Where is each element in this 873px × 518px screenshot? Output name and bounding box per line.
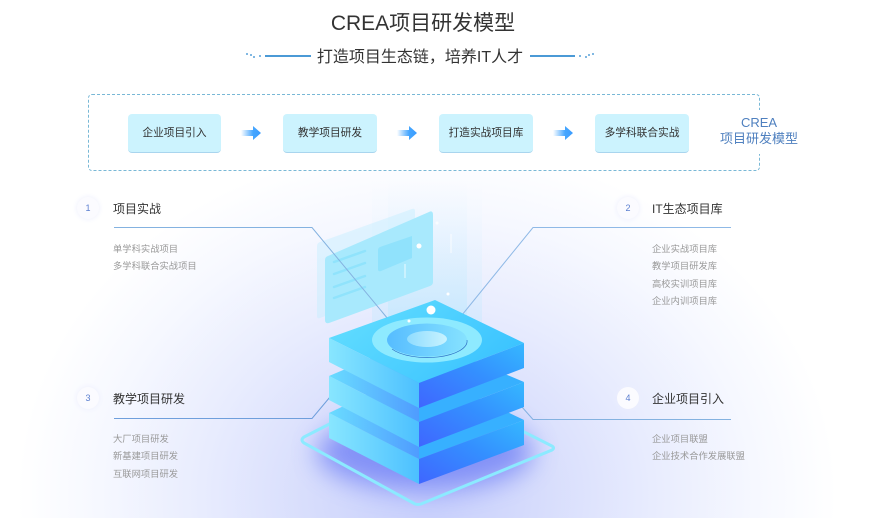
block 3: items: 互联网项目研发 [113, 469, 178, 479]
block 1: number [77, 197, 99, 219]
top slab [329, 300, 524, 408]
light column [372, 180, 482, 345]
title: CREA项目研发模型 [331, 12, 515, 35]
step: 教学项目研发: 教学项目研发 [298, 127, 362, 139]
panel label: CREA model: CREA [741, 115, 777, 130]
block 2: heading: IT生态项目库 [652, 202, 723, 216]
middle slab [329, 338, 524, 447]
subtitle decoration lines [246, 53, 594, 58]
panel: process flow frame [88, 94, 760, 171]
block 4: number: 4 [625, 393, 630, 403]
panel label: CREA model: 项目研发模型 [720, 131, 798, 146]
bottom slab [329, 370, 524, 484]
block 2: number: 2 [625, 203, 630, 213]
block 1: items: 单学科实战项目 [113, 244, 178, 254]
block 1: items [113, 244, 197, 271]
block 3: number [77, 387, 99, 409]
target rings [372, 318, 482, 362]
connector lines [114, 228, 731, 420]
step: 多学科联合实战: 多学科联合实战 [605, 127, 679, 139]
block 3: number: 3 [85, 393, 90, 403]
block 2: items: 企业内训项目库 [652, 296, 717, 306]
step: 多学科联合实战 [595, 114, 689, 153]
block 2: number [617, 197, 639, 219]
block 4: items [652, 434, 745, 461]
step: 企业项目引入: 企业项目引入 [142, 127, 207, 139]
block 1: items: 多学科联合实战项目 [113, 261, 197, 271]
arrows between steps [242, 126, 573, 140]
block 3: heading: 教学项目研发 [113, 392, 185, 406]
floating screen [317, 209, 451, 323]
block 2: items [652, 244, 717, 306]
block 4: items: 企业项目联盟 [652, 434, 708, 444]
step: 企业项目引入 [128, 114, 221, 153]
subtitle: 打造项目生态链，培养IT人才 [317, 49, 523, 66]
block 3: items: 大厂项目研发 [113, 434, 169, 444]
block 2: items: 企业实战项目库 [652, 244, 717, 254]
step: 教学项目研发 [283, 114, 377, 153]
base shadow [317, 414, 533, 490]
panel label: CREA model [715, 110, 803, 154]
base frame [302, 380, 554, 504]
block 3: items: 新基建项目研发 [113, 451, 178, 461]
step: 打造实战项目库 [439, 114, 533, 153]
sparkles [408, 222, 450, 322]
block 4: heading: 企业项目引入 [652, 392, 724, 406]
block 1: number: 1 [85, 203, 90, 213]
step: 打造实战项目库: 打造实战项目库 [449, 127, 523, 139]
block 1: heading: 项目实战 [113, 202, 161, 216]
block 3: items [113, 434, 178, 479]
block 4: items: 企业技术合作发展联盟 [652, 451, 745, 461]
block 2: items: 高校实训项目库 [652, 279, 717, 289]
block 2: items: 教学项目研发库 [652, 261, 717, 271]
block 4: number [617, 387, 639, 409]
